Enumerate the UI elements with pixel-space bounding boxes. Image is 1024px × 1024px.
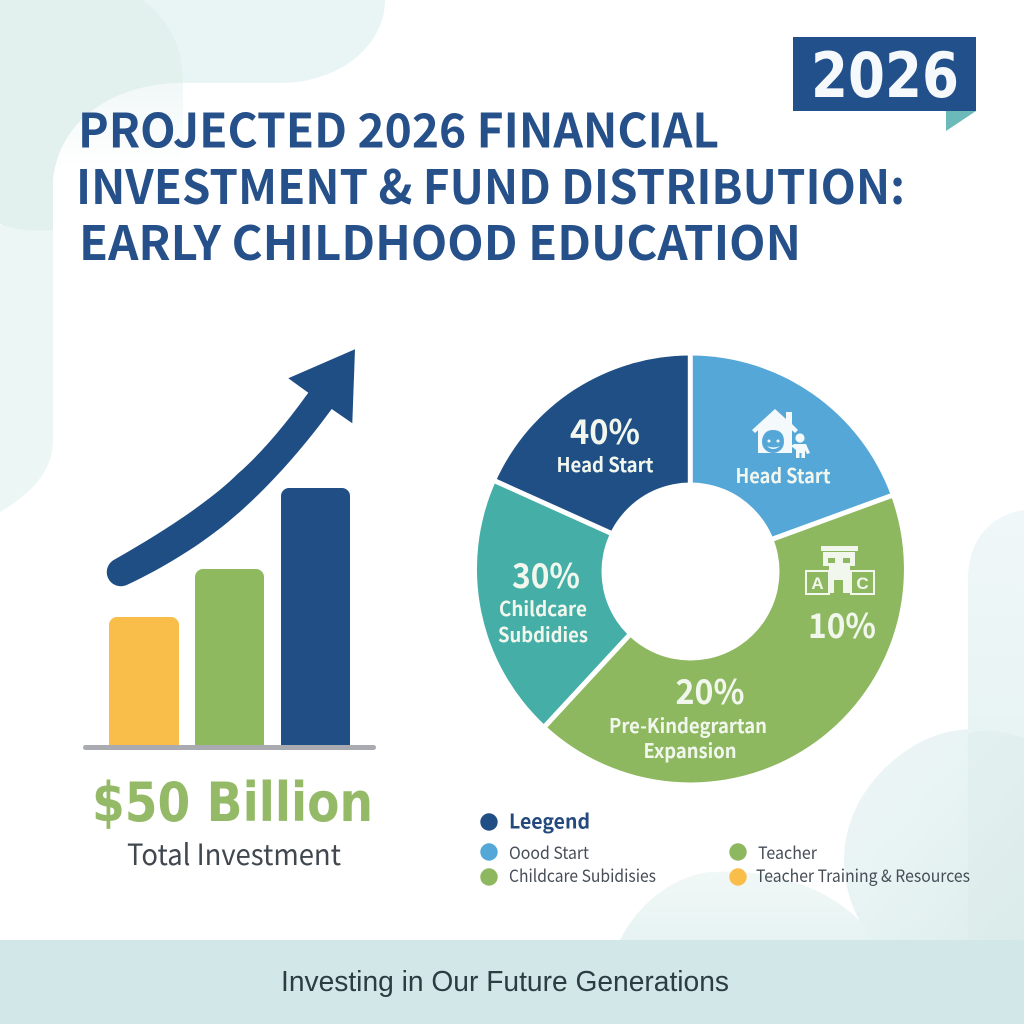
year badge [793, 37, 976, 131]
segment: navy Head Start 40%: 40% [570, 405, 640, 454]
title: EARLY CHILDHOOD EDUCATION [79, 205, 801, 274]
legend [480, 806, 970, 887]
bar chart with growth arrow [83, 349, 376, 750]
segment: light blue Head Start: Head Start [736, 460, 831, 489]
total amount: $50 Billion [92, 771, 373, 834]
footer band [0, 940, 1024, 1024]
total label: Total Investment [127, 832, 341, 874]
segment: teal Childcare Subsidies 30%: 30% [512, 549, 580, 598]
segment: green Pre-Kindergarten and Teacher: 10% [808, 599, 876, 648]
legend heading: Leegend [509, 806, 590, 834]
segment: green Pre-Kindergarten and Teacher: Expansion [644, 735, 736, 764]
segment: navy Head Start 40%: Head Start [556, 449, 654, 478]
legend item: Teacher [729, 839, 817, 864]
bar: green [195, 569, 264, 746]
segment: light blue Head Start [690, 356, 891, 569]
icon: house with child [752, 409, 810, 458]
bar: navy [281, 488, 350, 746]
segment: teal Childcare Subsidies 30%: Subdidies [498, 619, 588, 648]
icon: ABC blocks and school: C [856, 574, 869, 593]
bar: yellow [109, 617, 179, 746]
footer tagline: Investing in Our Future Generations [281, 966, 729, 998]
legend item: Teacher: Teacher [758, 839, 817, 864]
segment: green Pre-Kindergarten and Teacher: Pre-Kindegrartan [609, 710, 767, 739]
segment: green Pre-Kindergarten and Teacher [546, 496, 904, 782]
legend item: Oood Start: Oood Start [509, 839, 590, 864]
segment: teal Childcare Subsidies 30% [477, 481, 690, 726]
year badge: 2026 [811, 39, 959, 112]
title: PROJECTED 2026 FINANCIAL [78, 92, 719, 162]
segment: navy Head Start 40% [496, 356, 690, 569]
growth arrow [107, 349, 355, 586]
segment: teal Childcare Subsidies 30%: Childcare [499, 593, 587, 622]
title [76, 92, 905, 274]
title: INVESTMENT & FUND DISTRIBUTION: [76, 149, 905, 218]
icon: ABC blocks and school: A [811, 574, 824, 593]
legend item: Childcare Subidisies: Childcare Subidisies [509, 862, 656, 887]
legend item: Teacher Training and Resources: Teacher Training & Resources [756, 862, 970, 887]
icon: ABC blocks and school [806, 546, 874, 594]
segment: green Pre-Kindergarten and Teacher: 20% [676, 665, 744, 714]
donut chart [477, 350, 904, 782]
